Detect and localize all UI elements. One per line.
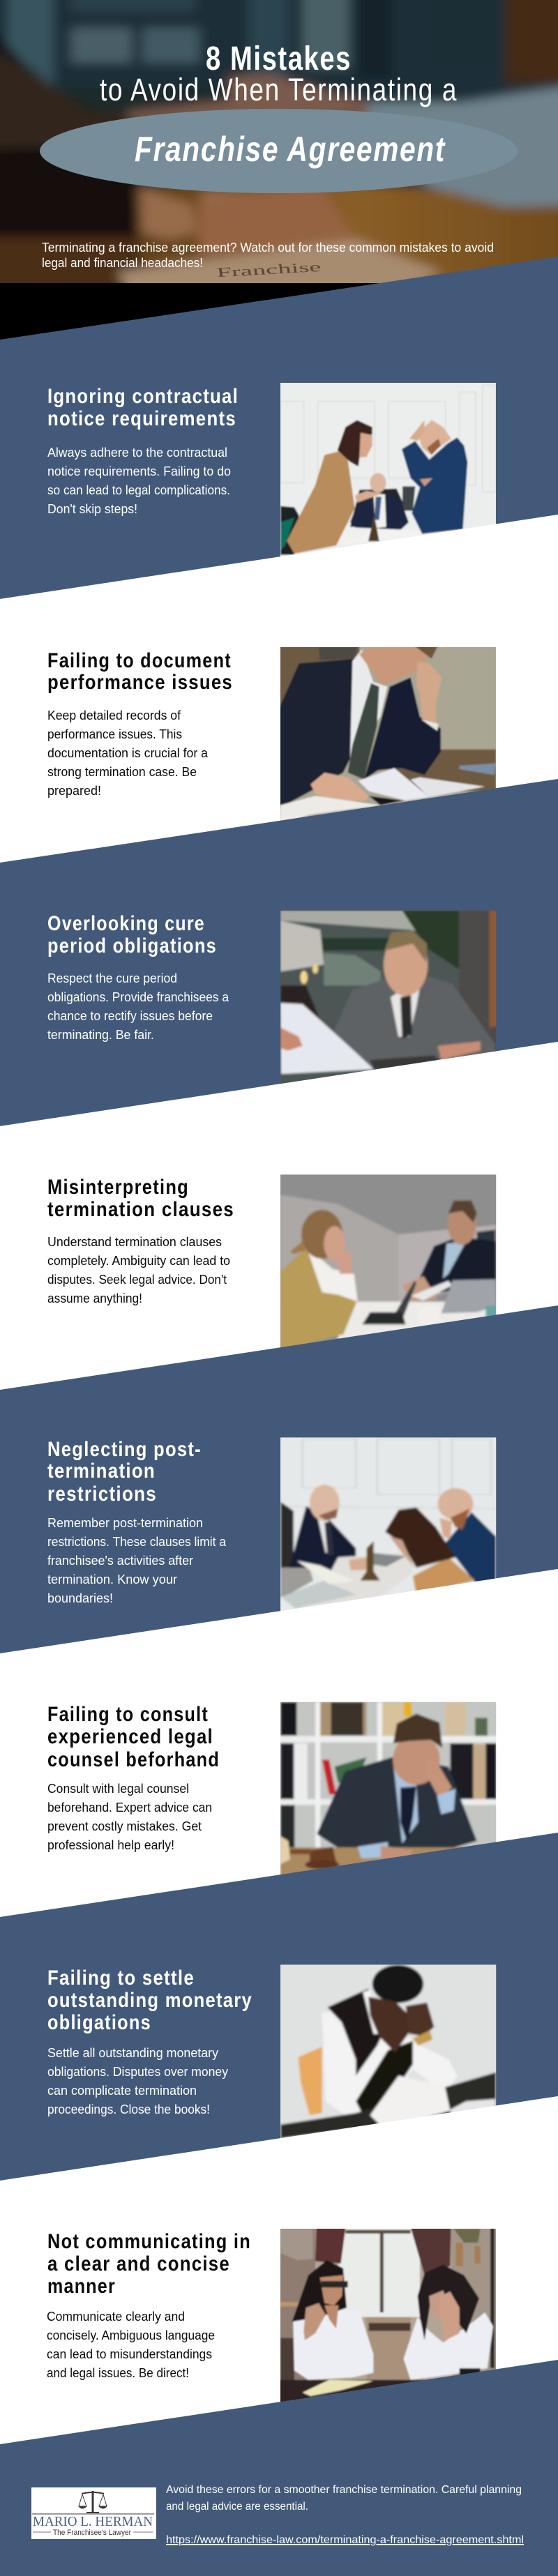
panel background bbox=[0, 257, 558, 599]
heading bbox=[47, 2230, 251, 2298]
heading: termination clauses bbox=[47, 1198, 234, 1221]
intro text: legal and financial headaches! bbox=[42, 256, 203, 270]
body text: boundaries! bbox=[47, 1591, 113, 1605]
heading: Neglecting post- bbox=[47, 1438, 202, 1461]
body text: Always adhere to the contractual bbox=[47, 446, 227, 460]
heading: period obligations bbox=[47, 934, 217, 957]
photo: three people in discussion at a table bbox=[280, 1437, 497, 1611]
heading bbox=[47, 1438, 202, 1506]
body text bbox=[47, 2046, 228, 2116]
heading: Ignoring contractual bbox=[47, 385, 239, 408]
panel 5: Neglecting post-termination restrictions bbox=[0, 1305, 558, 1653]
heading: Failing to settle bbox=[47, 1967, 195, 1990]
body text: Keep detailed records of bbox=[47, 709, 181, 722]
body text bbox=[47, 709, 209, 798]
body text: Don't skip steps! bbox=[47, 502, 137, 516]
heading: performance issues bbox=[47, 671, 233, 694]
intro text bbox=[42, 241, 494, 270]
heading: termination bbox=[47, 1460, 156, 1483]
photo: stressed man in suit signing documents bbox=[280, 647, 496, 821]
photo: businessman reading a document bbox=[280, 911, 497, 1084]
panel background bbox=[0, 2096, 558, 2444]
photo: woman and man reviewing documents at desk bbox=[280, 1174, 497, 1347]
body text: professional help early! bbox=[47, 1838, 174, 1852]
body text bbox=[47, 1235, 230, 1305]
body text: obligations. Provide franchisees a bbox=[47, 990, 229, 1004]
body text: chance to rectify issues before bbox=[47, 1009, 213, 1023]
intro text: Terminating a franchise agreement? Watch out for these common mistakes to avoid bbox=[42, 241, 494, 255]
body text: and legal issues. Be direct! bbox=[47, 2366, 189, 2380]
heading: experienced legal bbox=[47, 1725, 213, 1748]
icon: scales of justice bbox=[32, 2491, 154, 2532]
photo: colleagues arguing in white office bbox=[280, 383, 496, 556]
heading bbox=[47, 1176, 234, 1221]
logo: Mario L. Herman: MARIO L. HERMAN bbox=[33, 2514, 153, 2529]
panel background bbox=[0, 1833, 558, 2181]
logo: Mario L. Herman bbox=[31, 2487, 156, 2539]
title badge ellipse bbox=[40, 109, 518, 193]
source link: https://www.franchise-law.com/terminating-a-franchise-agreement.shtml bbox=[166, 2534, 524, 2546]
body text: Understand termination clauses bbox=[47, 1235, 222, 1249]
panel 4: Misinterpreting termination clauses bbox=[0, 1042, 558, 1347]
heading: obligations bbox=[47, 2011, 151, 2034]
body text: terminating. Be fair. bbox=[47, 1028, 154, 1042]
panel 1: Ignoring contractual notice requirements bbox=[0, 257, 558, 599]
body text: can lead to misunderstandings bbox=[47, 2347, 212, 2361]
title: to Avoid When Terminating a: to Avoid When Terminating a bbox=[100, 72, 458, 107]
panel: footer bbox=[0, 2360, 558, 2576]
heading: Failing to document bbox=[47, 649, 232, 672]
heading bbox=[47, 385, 239, 430]
body text: assume anything! bbox=[47, 1291, 142, 1305]
closing text bbox=[166, 2484, 522, 2513]
black band under header bbox=[0, 283, 558, 353]
body text: so can lead to legal complications. bbox=[47, 483, 230, 497]
body text bbox=[47, 1516, 227, 1605]
title: 8 Mistakes: 8 Mistakes bbox=[206, 40, 352, 77]
closing text: and legal advice are essential. bbox=[166, 2501, 308, 2513]
body text: prevent costly mistakes. Get bbox=[47, 1819, 202, 1833]
heading: restrictions bbox=[47, 1483, 157, 1506]
body text: Settle all outstanding monetary bbox=[47, 2046, 218, 2060]
heading: outstanding monetary bbox=[47, 1989, 252, 2012]
panel background bbox=[0, 1305, 558, 1653]
body text: restrictions. These clauses limit a bbox=[47, 1535, 227, 1549]
heading: manner bbox=[47, 2275, 116, 2298]
photo: man with head in hands at table bbox=[280, 1964, 497, 2138]
photo: two businesswomen at a cafe table bbox=[280, 2229, 496, 2402]
panel background bbox=[0, 1569, 558, 1917]
body text bbox=[47, 1782, 212, 1852]
body text: proceedings. Close the books! bbox=[47, 2103, 210, 2116]
body text: performance issues. This bbox=[47, 727, 182, 741]
closing text: Avoid these errors for a smoother franchise termination. Careful planning bbox=[166, 2484, 522, 2496]
heading bbox=[47, 1967, 252, 2034]
body text: documentation is crucial for a bbox=[47, 746, 209, 760]
heading: Overlooking cure bbox=[47, 912, 205, 935]
body text: prepared! bbox=[47, 784, 101, 798]
franchise document word: Franchise bbox=[216, 260, 322, 280]
body text: beforehand. Expert advice can bbox=[47, 1801, 212, 1814]
heading bbox=[47, 649, 233, 694]
panel background bbox=[0, 2360, 558, 2576]
panel 8: Not communicating in a clear and concise manner bbox=[0, 2096, 558, 2402]
body text: termination. Know your bbox=[47, 1573, 177, 1586]
heading: Not communicating in bbox=[47, 2230, 251, 2253]
body text: Respect the cure period bbox=[47, 971, 177, 985]
body text: notice requirements. Failing to do bbox=[47, 464, 231, 478]
panel 3: Overlooking cure period obligations bbox=[0, 779, 558, 1126]
body text: disputes. Seek legal advice. Don't bbox=[47, 1273, 227, 1287]
heading: counsel beforhand bbox=[47, 1748, 220, 1771]
heading: Misinterpreting bbox=[47, 1176, 189, 1199]
title: Franchise Agreement: Franchise Agreement bbox=[135, 130, 446, 169]
body text: Consult with legal counsel bbox=[47, 1782, 189, 1796]
panel background bbox=[0, 1042, 558, 1390]
header photo: handshake over franchise agreement bbox=[0, 0, 558, 298]
heading: Failing to consult bbox=[47, 1703, 209, 1726]
heading bbox=[47, 912, 217, 957]
heading: a clear and concise bbox=[47, 2252, 230, 2275]
panel background bbox=[0, 515, 558, 863]
body text: completely. Ambiguity can lead to bbox=[47, 1254, 230, 1268]
heading bbox=[47, 1703, 220, 1771]
body text bbox=[47, 971, 229, 1042]
body text bbox=[47, 2310, 215, 2380]
heading: notice requirements bbox=[47, 407, 236, 430]
body text: can complicate termination bbox=[47, 2084, 197, 2098]
body text: franchisee's activities after bbox=[47, 1554, 193, 1568]
panel 7: Failing to settle outstanding monetary obligations bbox=[0, 1833, 558, 2181]
panel 6: Failing to consult experienced legal counsel beforhand bbox=[0, 1569, 558, 1874]
photo: stressed lawyer at desk with gavel and bookshelves bbox=[280, 1702, 497, 1874]
panel background bbox=[0, 779, 558, 1126]
body text: Communicate clearly and bbox=[47, 2310, 185, 2324]
body text: concisely. Ambiguous language bbox=[47, 2328, 215, 2342]
logo: Mario L. Herman: The Franchisee's Lawyer bbox=[53, 2529, 131, 2537]
panel: introduction header text bbox=[40, 40, 518, 270]
body text: obligations. Disputes over money bbox=[47, 2065, 228, 2079]
body text bbox=[47, 446, 231, 516]
body text: Remember post-termination bbox=[47, 1516, 203, 1530]
body text: strong termination case. Be bbox=[47, 765, 197, 779]
panel 2: Failing to document performance issues bbox=[0, 515, 558, 821]
